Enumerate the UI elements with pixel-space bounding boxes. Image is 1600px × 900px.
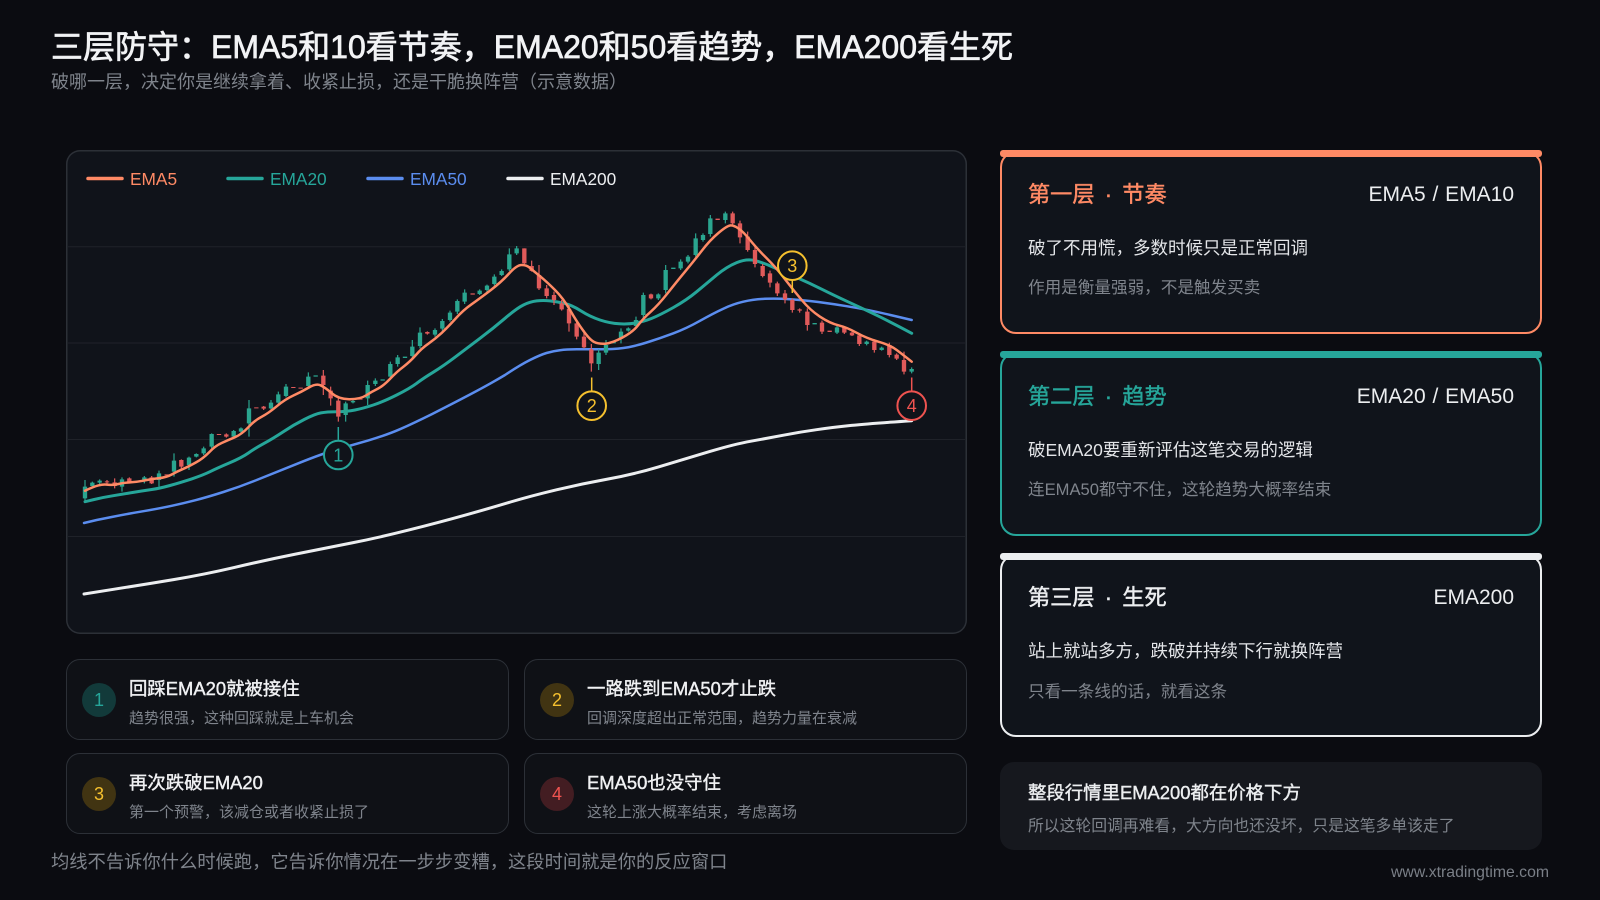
legend: EMA20 (270, 169, 327, 189)
layer 1 heading: 第一层 · 节奏 (1028, 182, 1167, 207)
badge 4: 4 (552, 784, 562, 804)
marker 4 (897, 378, 926, 420)
note 2 (524, 659, 967, 740)
marker 1: 1 (333, 446, 343, 466)
website watermark: www.xtradingtime.com (1391, 864, 1549, 881)
legend: EMA5 (130, 169, 177, 189)
panel: layer 3 (1000, 553, 1542, 737)
line: EMA50 (84, 299, 912, 523)
badge 3: 3 (94, 784, 104, 804)
line: EMA200 (84, 421, 912, 594)
badge 2 (540, 683, 574, 717)
layer 1 body: 破了不用慌，多数时候只是正常回调 (1028, 238, 1308, 258)
badge 3 (82, 776, 116, 810)
marker 1 (324, 427, 353, 469)
layer 2 lines: EMA20 / EMA50 (1357, 385, 1514, 408)
line: EMA20 (85, 260, 912, 502)
note 4 text: 这轮上涨大概率结束，考虑离场 (587, 804, 797, 820)
layer 2 body: 破EMA20要重新评估这笔交易的逻辑 (1028, 440, 1313, 460)
note 4 (524, 752, 967, 834)
layer 2 detail: 连EMA50都守不住，这轮趋势大概率结束 (1028, 480, 1331, 499)
badge 1 (82, 683, 116, 717)
marker 3: 3 (787, 256, 797, 276)
layer 3 body: 站上就站多方，跌破并持续下行就换阵营 (1028, 641, 1343, 661)
line: EMA5 (85, 225, 912, 491)
marker 2 (577, 378, 606, 420)
legend: EMA50 (410, 169, 467, 189)
badge 2: 2 (552, 690, 562, 710)
note 3 text: 第一个预警，该减仓或者收紧止损了 (129, 804, 369, 820)
footer takeaway: 均线不告诉你什么时候跑，它告诉你情况在一步步变糟，这段时间就是你的反应窗口 (51, 851, 727, 872)
note 1 heading: 回踩EMA20就被接住 (129, 678, 300, 699)
note 2 heading: 一路跌到EMA50才止跌 (587, 678, 776, 699)
note 3 heading: 再次跌破EMA20 (129, 772, 263, 792)
panel: layer 2 (1000, 351, 1542, 536)
note 1 text: 趋势很强，这种回踩就是上车机会 (129, 710, 354, 727)
title: 三层防守：EMA5和10看节奏，EMA20和50看趋势，EMA200看生死 (51, 29, 1013, 65)
panel: EMA chart (66, 150, 967, 634)
legend (88, 169, 616, 189)
badge 4 (540, 776, 574, 810)
callout text: 所以这轮回调再难看，大方向也还没坏，只是这笔多单该走了 (1028, 818, 1455, 835)
layer 2 heading: 第二层 · 趋势 (1028, 384, 1167, 409)
note 3 (66, 752, 509, 834)
layer 3 heading: 第三层 · 生死 (1028, 585, 1167, 610)
callout heading: 整段行情里EMA200都在价格下方 (1028, 782, 1301, 803)
candlesticks (85, 212, 912, 502)
marker 3 (778, 251, 807, 293)
note 2 text: 回调深度超出正常范围，趋势力量在衰减 (587, 710, 857, 727)
marker 2: 2 (587, 396, 597, 416)
note 1 (66, 659, 509, 740)
layer 1 detail: 作用是衡量强弱，不是触发买卖 (1028, 278, 1260, 297)
badge 1: 1 (94, 690, 104, 710)
note 4 heading: EMA50也没守住 (587, 772, 721, 792)
subtitle: 破哪一层，决定你是继续拿着、收紧止损，还是干脆换阵营（示意数据） (51, 72, 627, 92)
legend: EMA200 (550, 169, 616, 189)
layer 3 lines: EMA200 (1433, 586, 1514, 609)
layer 3 detail: 只看一条线的话，就看这条 (1028, 682, 1227, 701)
marker 4: 4 (907, 396, 917, 416)
panel: layer 1 (1000, 150, 1542, 334)
layer 1 lines: EMA5 / EMA10 (1368, 183, 1514, 206)
callout: EMA200 summary (1000, 762, 1542, 850)
